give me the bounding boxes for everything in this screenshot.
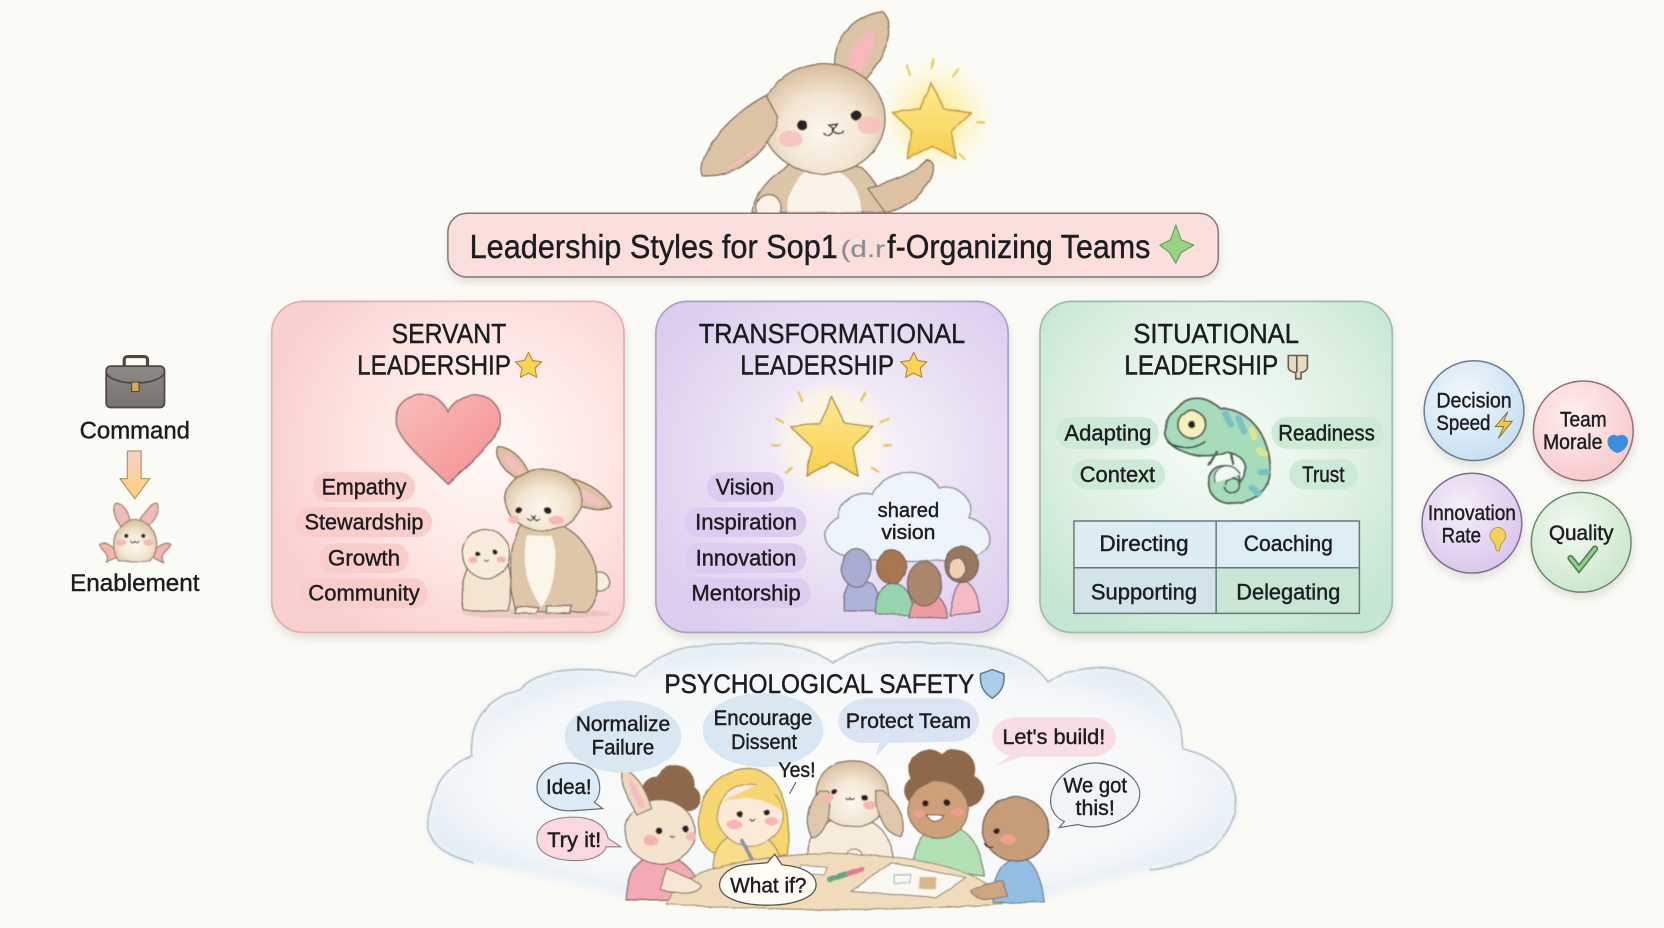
panel: command to enablement	[70, 357, 200, 597]
panel: psychological safety cloud	[428, 642, 1236, 909]
speech bubble: protect team	[838, 698, 979, 757]
keyword pills: Adapting	[1064, 420, 1151, 445]
speech bubble: try it	[537, 817, 621, 861]
keyword pills: Innovation	[696, 546, 796, 571]
icon: heart	[396, 395, 500, 484]
icon: briefcase	[106, 357, 165, 407]
metrics: outcome circles	[1422, 361, 1633, 592]
icon: green leaf star	[1160, 225, 1194, 263]
heading: servant leadership	[357, 318, 511, 381]
character: curly haired boy	[904, 749, 984, 875]
speech bubble: encourage dissent	[703, 693, 824, 767]
face	[797, 120, 808, 131]
star glow	[877, 57, 995, 176]
speech bubble: encourage dissent: Dissent	[731, 731, 797, 754]
illustration: parent rabbit and baby	[462, 447, 611, 619]
title banner	[448, 213, 1218, 277]
speech bubble: encourage dissent: Encourage	[714, 707, 812, 730]
illustration: paper and markers	[798, 863, 966, 898]
metric: innovation rate: Rate	[1442, 524, 1481, 547]
metric: decision speed: Decision	[1436, 389, 1512, 412]
keyword pills: Inspiration	[695, 510, 797, 535]
keyword pills: Vision	[716, 475, 774, 500]
matrix: four situational modes: Supporting	[1091, 580, 1197, 605]
speech bubble: yes: Yes!	[778, 759, 816, 782]
title text: (d.r	[840, 236, 885, 262]
heading: transformational leadership	[699, 318, 965, 381]
speech bubble: normalize failure: Failure	[592, 736, 654, 759]
speech bubble: what if	[720, 854, 816, 905]
keyword pills: Trust	[1302, 462, 1345, 487]
metric: team morale	[1533, 381, 1633, 481]
cloud outline	[428, 642, 1236, 870]
heading: situational leadership: SITUATIONAL	[1133, 318, 1299, 349]
table	[666, 853, 1003, 909]
mascot: rabbit holding star	[701, 12, 995, 222]
heading: psychological safety: PSYCHOLOGICAL SAFETY	[664, 669, 974, 699]
illustration: shared vision cloud: shared	[878, 500, 939, 522]
panel: situational leadership	[1040, 301, 1392, 632]
title text: f-Organizing Teams	[887, 228, 1150, 265]
title text	[470, 228, 1150, 265]
character: rabbit arm	[660, 868, 701, 893]
arrow: down	[120, 451, 150, 499]
character: curly haired rabbit	[622, 765, 703, 900]
heading: transformational leadership: LEADERSHIP	[740, 350, 894, 381]
metric: team morale: Morale	[1543, 431, 1602, 454]
heading: servant leadership: LEADERSHIP	[357, 350, 511, 381]
metric: decision speed	[1424, 361, 1524, 461]
speech bubble: idea	[537, 763, 603, 811]
metric: quality	[1531, 492, 1631, 592]
keyword pills	[681, 472, 811, 608]
title text: Leadership Styles for Sop1	[470, 228, 838, 265]
speech bubble: try it: Try it!	[547, 829, 601, 852]
star	[892, 84, 971, 159]
heading: situational leadership	[1124, 318, 1299, 381]
metric: innovation rate	[1422, 473, 1522, 573]
metric: team morale: Team	[1560, 409, 1607, 432]
speech bubble: protect team: Protect Team	[846, 710, 971, 733]
matrix: four situational modes: Directing	[1099, 531, 1189, 556]
illustration: people looking up	[842, 547, 980, 618]
speech bubble: let's build: Let's build!	[1002, 726, 1105, 749]
matrix: four situational modes	[1074, 521, 1359, 613]
matrix: four situational modes: Coaching	[1244, 531, 1333, 556]
icon: glowing star	[773, 386, 891, 488]
matrix: four situational modes: Delegating	[1236, 580, 1340, 605]
metric: innovation rate: Innovation	[1428, 502, 1516, 525]
panel: servant leadership	[272, 301, 624, 632]
speech bubble: normalize failure: Normalize	[576, 713, 670, 736]
character: blonde girl	[698, 768, 788, 870]
speech bubble: what if: What if?	[730, 874, 807, 897]
keyword pills: Growth	[328, 546, 400, 571]
metric: quality: Quality	[1549, 522, 1614, 545]
speech bubble: we got this	[1051, 763, 1140, 828]
character: bald child	[971, 797, 1048, 903]
icon: signpost	[1288, 355, 1307, 379]
heading: servant leadership: SERVANT	[392, 318, 506, 349]
speech bubble: let's build	[992, 717, 1116, 766]
keyword pills: Community	[308, 581, 421, 606]
keyword pills: Stewardship	[305, 510, 423, 535]
speech bubble: idea: Idea!	[546, 776, 592, 799]
speech bubble: we got this: We got	[1063, 775, 1127, 798]
speech bubble: we got this: this!	[1076, 797, 1115, 820]
keyword pills: Readiness	[1278, 420, 1375, 445]
speech bubble: normalize failure	[565, 700, 681, 773]
heading: transformational leadership: TRANSFORMATIONAL	[699, 318, 965, 349]
keyword pills: Mentorship	[691, 581, 801, 606]
keyword pills: Empathy	[322, 475, 407, 500]
label: command: Command	[80, 417, 190, 444]
icon: shield	[980, 670, 1004, 698]
icon: star	[515, 352, 542, 377]
illustration: shared vision cloud	[825, 472, 990, 561]
keyword pills: Context	[1080, 462, 1156, 487]
character: lop eared rabbit	[807, 761, 904, 865]
heading: situational leadership: LEADERSHIP	[1124, 350, 1278, 381]
icon: small rabbit	[100, 503, 171, 562]
panel: transformational leadership	[656, 301, 1008, 632]
keyword pills	[1056, 417, 1384, 489]
illustration: chameleon	[1164, 399, 1270, 503]
icon: star	[901, 352, 927, 377]
speech bubble: yes	[778, 759, 816, 794]
illustration: shared vision cloud: vision	[881, 522, 935, 544]
table and characters	[622, 749, 1048, 909]
keyword pills	[296, 472, 432, 608]
label: enablement: Enablement	[70, 570, 200, 597]
metric: decision speed: Speed	[1436, 412, 1490, 435]
